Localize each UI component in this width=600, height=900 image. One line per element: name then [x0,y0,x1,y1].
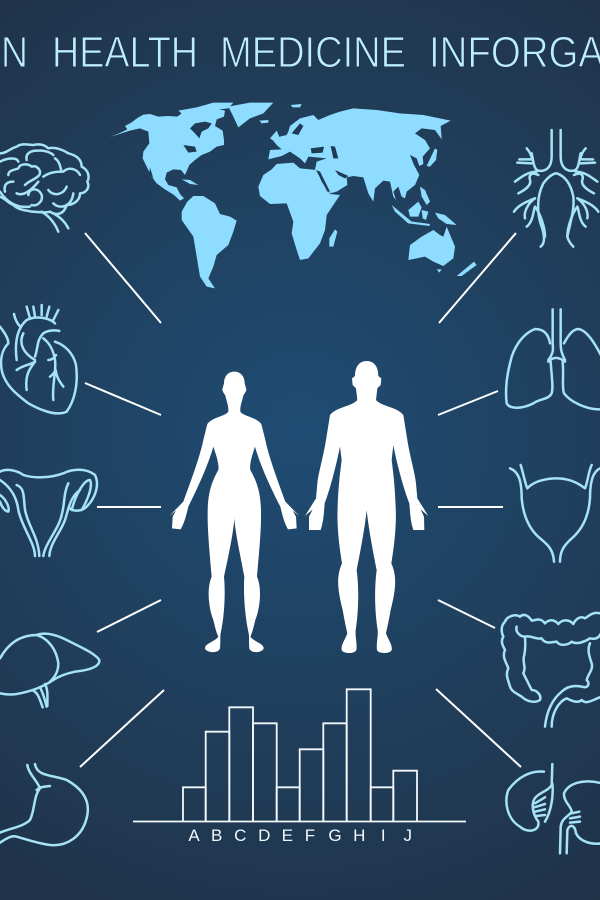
icon: bronchial tree [514,130,598,247]
bar chart: A [188,826,200,845]
icon: bladder [510,465,600,562]
icon: heart [0,305,77,413]
bar chart: D [258,826,270,845]
bar chart: H [353,826,365,845]
icon: lungs [506,309,600,409]
icon: kidneys [506,764,600,853]
title: MEDICINE [220,28,406,77]
icon: uterus [0,470,97,556]
icon: stomach [0,764,88,845]
bar chart: B [211,826,222,845]
bar chart: J [403,826,412,845]
bar chart: F [305,826,315,845]
male figure [305,361,428,653]
female figure [169,372,299,652]
title: N [1,28,28,77]
bar chart: C [234,826,246,845]
bar chart: I [381,826,386,845]
bar chart [133,689,466,845]
icon: colon [502,613,600,727]
title: HEALTH [52,28,198,77]
icon: brain [0,144,89,232]
icon: liver [0,634,99,707]
world map [110,103,477,288]
bar chart: E [282,826,293,845]
title [1,28,600,77]
connector lines [80,233,521,767]
bar chart: G [328,826,342,845]
